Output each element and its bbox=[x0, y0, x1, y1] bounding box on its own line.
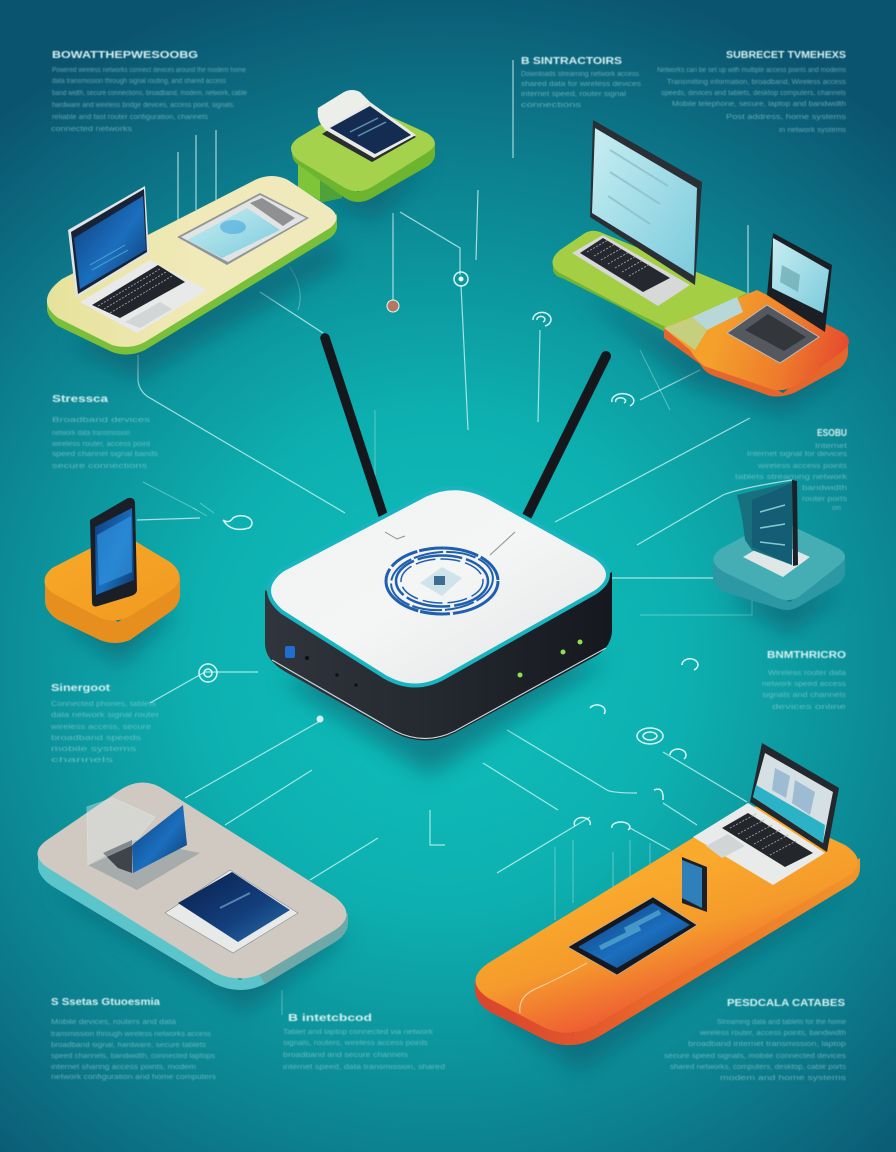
text block: top right: Mobile telephone, secure, laptop and bandwidth bbox=[672, 101, 846, 108]
text block: bottom middle: internet speed, data transmission, shared bbox=[283, 1064, 445, 1071]
icon: large laptop bbox=[572, 120, 702, 306]
text block: right upper bbox=[735, 427, 848, 512]
text block: top middle: connections bbox=[521, 102, 582, 109]
text block: bottom left: speed channels, bandwidth, connected laptops bbox=[51, 1053, 216, 1060]
text block: left middle: Sinergoot bbox=[51, 682, 111, 694]
text block: right middle: BNMTHRICRO bbox=[767, 649, 846, 661]
text block: top middle bbox=[521, 55, 642, 109]
text block: left middle: mobile systems bbox=[51, 746, 137, 753]
text block: right middle: network speed access bbox=[762, 681, 847, 688]
router bbox=[265, 488, 612, 740]
text block: bottom right: broadband internet transmission, laptop bbox=[688, 1041, 846, 1048]
connector lines bbox=[137, 60, 792, 1015]
icon: tablet bbox=[177, 193, 309, 265]
text block: right upper: Internet signal for devices bbox=[747, 451, 848, 458]
text block: bottom right: shared networks, computers, desktop, cable ports bbox=[670, 1064, 847, 1071]
text block: top left: connected networks bbox=[51, 126, 133, 133]
text block: left upper: speed channel signal bands bbox=[52, 451, 159, 458]
platform: left orange with phone bbox=[44, 498, 180, 643]
ground shadows bbox=[50, 165, 860, 1072]
text block: bottom middle: broadband and secure channels bbox=[283, 1052, 409, 1059]
text block: right middle: devices online bbox=[772, 704, 846, 711]
text block: top left: hardware and wireless bridge devices, access point, signals. bbox=[52, 102, 235, 109]
text block: right middle: Wireless router data bbox=[768, 670, 846, 677]
text block: left middle: wireless access, secure bbox=[50, 724, 151, 731]
text block: right middle bbox=[762, 649, 847, 711]
text block: top left: reliable and fast router configuration, channels bbox=[52, 114, 209, 121]
text block: left upper: Stressca bbox=[52, 393, 108, 405]
text block: bottom left: Mobile devices, routers and data bbox=[51, 1019, 176, 1026]
text block: top right: in network systems bbox=[779, 127, 847, 134]
text block: top right: SUBRECET TVMEHEXS bbox=[726, 49, 846, 61]
router logo ring bbox=[386, 548, 498, 614]
text block: bottom middle: signals, routers, wireless access points bbox=[283, 1040, 429, 1047]
text block: left upper bbox=[51, 393, 159, 470]
text block: left upper: Broadband devices bbox=[52, 417, 151, 424]
text block: top left: BOWATTHEPWESOOBG bbox=[52, 49, 198, 61]
text block: bottom right: modem and home systems bbox=[720, 1075, 847, 1082]
text block: right upper: wireless access points bbox=[757, 463, 848, 470]
text block: top middle: B SINTRACTOIRS bbox=[521, 55, 622, 67]
text block: left upper: network data transmission bbox=[52, 430, 130, 437]
text block: bottom right: secure speed signals, mobile connected devices bbox=[664, 1053, 847, 1060]
platform: top green bbox=[291, 90, 435, 202]
text block: bottom right bbox=[664, 997, 847, 1082]
text block: top right: Post address, home systems bbox=[726, 114, 847, 121]
antenna: left bbox=[325, 338, 384, 518]
icon: phone bbox=[682, 857, 707, 912]
text blocks bbox=[50, 49, 848, 1082]
platform: bottom-right orange bbox=[475, 743, 860, 1045]
text block: right upper: tablets streaming network bbox=[735, 474, 848, 481]
text block: bottom left: S Ssetas Gtuoesmia bbox=[51, 996, 160, 1008]
router logo centre bbox=[420, 567, 462, 596]
text block: left middle: data network signal router bbox=[51, 712, 160, 719]
platform: right teal with tablet bbox=[713, 480, 845, 610]
icon: device and tablet on green platform bbox=[318, 90, 416, 162]
antenna: right bbox=[525, 356, 606, 520]
text block: right upper: bandwidth bbox=[802, 485, 847, 492]
text block: bottom right: Streaming data and tablets for the home bbox=[717, 1019, 846, 1026]
icon: tablet bbox=[568, 897, 697, 975]
text block: left middle: Connected phones, tablets bbox=[51, 701, 157, 708]
router body bbox=[265, 572, 612, 740]
text block: left upper: wireless router, access point bbox=[51, 441, 150, 448]
text block: top middle: internet speed, router signal bbox=[521, 91, 627, 98]
platform: top-left cream and green bbox=[47, 176, 337, 355]
text block: right upper: router ports bbox=[802, 496, 848, 503]
platform: top-right green and red bbox=[552, 120, 849, 396]
text block: bottom middle: Tablet and laptop connected via network bbox=[283, 1029, 434, 1036]
icon: tablet on stand bbox=[737, 480, 810, 577]
text block: right upper: on bbox=[832, 505, 841, 512]
icon: laptop left bbox=[68, 186, 207, 333]
text block: bottom left: transmission through wireless networks access bbox=[51, 1031, 212, 1038]
text block: right upper: Internet bbox=[815, 443, 847, 450]
text block: bottom left bbox=[51, 996, 217, 1081]
text block: bottom left: broadband signal, hardware, secure tablets bbox=[51, 1042, 207, 1049]
platform: bottom-left beige bbox=[37, 782, 348, 990]
status lights bbox=[518, 640, 582, 678]
text block: top right: Networks can be set up with multiple access points and modems bbox=[657, 67, 846, 74]
router top surface bbox=[269, 488, 608, 686]
text block: top left: band width, secure connections, broadband, modem, network, cable bbox=[52, 90, 247, 97]
text block: left upper: secure connections bbox=[52, 463, 148, 470]
text block: left middle bbox=[50, 682, 160, 764]
text block: bottom left: network configuration and home computers bbox=[51, 1074, 217, 1081]
signal swirl icons bbox=[193, 272, 698, 830]
text block: top middle: Downloads streaming network access bbox=[521, 71, 639, 78]
text block: bottom middle bbox=[283, 1012, 445, 1071]
text block: top left bbox=[51, 49, 247, 133]
icon: dark tablet bbox=[165, 870, 298, 953]
small top icon bbox=[385, 532, 515, 555]
text block: bottom left: internet sharing access points, modem bbox=[51, 1064, 196, 1071]
port bbox=[285, 646, 295, 658]
text block: left middle: channels bbox=[51, 757, 114, 764]
text block: top right bbox=[657, 49, 847, 134]
text block: bottom right: wireless router, access points, bandwidth bbox=[699, 1030, 846, 1037]
text block: bottom right: PESDCALA CATABES bbox=[727, 997, 845, 1009]
icon: phone bbox=[90, 498, 137, 606]
icon: small dark laptop bbox=[727, 233, 832, 363]
icon: glass laptop bbox=[87, 798, 200, 890]
text block: top middle: shared data for wireless devices bbox=[521, 81, 642, 88]
text block: top left: Powered wireless networks connect devices around the modern home bbox=[52, 67, 246, 74]
text block: top right: Transmitting information, broadband, Wireless access bbox=[667, 79, 847, 86]
text block: top left: data transmission through signal routing, and shared access bbox=[52, 78, 226, 85]
text block: left middle: broadband speeds bbox=[51, 735, 142, 742]
text block: right upper: ESOBU bbox=[817, 427, 847, 439]
icon: laptop bbox=[693, 743, 839, 885]
cable bbox=[520, 963, 587, 1013]
text block: bottom middle: B intetcbcod bbox=[288, 1012, 372, 1024]
text block: right middle: signals and channels bbox=[762, 692, 847, 699]
text block: top right: speeds, devices and tablets, desktop computers, channels bbox=[661, 90, 846, 97]
